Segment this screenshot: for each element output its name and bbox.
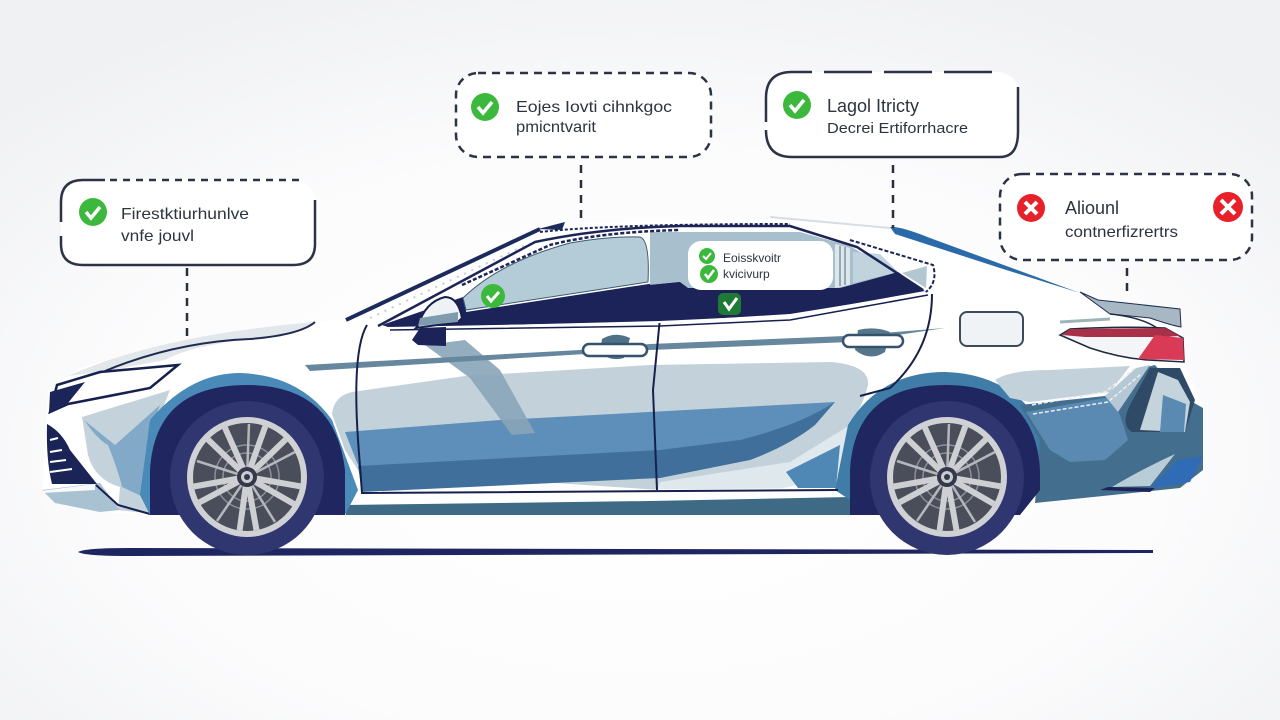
panel: warning callout xyxy=(1000,174,1252,260)
rear door handle xyxy=(843,328,903,357)
panel: legal callout xyxy=(766,72,1019,157)
icon: green check on front window xyxy=(481,284,505,308)
window label text: kvicivurp xyxy=(723,267,770,281)
rear door blue panel xyxy=(786,445,840,488)
beltline chrome xyxy=(389,292,925,329)
door shading: medium blue band xyxy=(345,402,835,470)
connector: panel 1 xyxy=(186,268,188,340)
door lines xyxy=(356,325,838,493)
A-pillar outer xyxy=(343,222,565,322)
rear wheel arch xyxy=(850,385,1040,515)
callout text: vnfe jouvl xyxy=(121,228,194,245)
car body xyxy=(42,220,1203,515)
rear bumper xyxy=(1020,365,1203,503)
rear spoiler xyxy=(1080,292,1181,327)
icon: small green check bottom xyxy=(700,265,718,283)
front wheel xyxy=(170,401,324,555)
callout text: Firestktiurhunlve xyxy=(121,206,249,223)
window label text: Eoisskvoitr xyxy=(723,251,781,265)
rear wheel xyxy=(870,401,1024,555)
icon: green check xyxy=(471,93,499,121)
rear bumper grey panel xyxy=(995,366,1130,402)
callout text: Lagol Itricty xyxy=(827,96,919,116)
car illustration xyxy=(40,217,1203,555)
icon: green check xyxy=(783,91,811,119)
connector: panel 3 xyxy=(892,165,894,228)
rear pillar stripes xyxy=(835,244,850,288)
hood edge xyxy=(68,322,315,376)
rear window surround xyxy=(680,232,925,320)
callout text: pmicntvarit xyxy=(516,119,597,136)
window label panel xyxy=(688,241,833,290)
fuel door xyxy=(960,312,1023,346)
panel: top-centre callout xyxy=(456,73,711,157)
callout text: Decrei Ertiforrhacre xyxy=(827,120,968,137)
side mirror xyxy=(412,297,462,346)
callout text: Eojes Iovti cihnkgoc xyxy=(516,99,672,116)
front arch trim xyxy=(140,373,358,515)
rear quarter glass xyxy=(853,252,898,283)
callout text: Aliounl xyxy=(1065,198,1119,218)
windows navy xyxy=(382,272,926,327)
front grille xyxy=(47,424,97,484)
door shading: light band xyxy=(332,362,868,490)
blue trunk strip xyxy=(890,227,1080,293)
headlight xyxy=(49,365,178,413)
connector: panel 2 xyxy=(580,165,582,218)
icon: green check on rear window xyxy=(718,293,741,315)
rear arch trim xyxy=(835,372,1042,500)
tail light xyxy=(1060,327,1184,362)
front window glass xyxy=(463,237,648,310)
swage line xyxy=(305,328,945,371)
door shading: lower white xyxy=(657,425,850,490)
door shading: dark blue band xyxy=(358,402,835,492)
B-pillar xyxy=(650,232,682,285)
mirror shadow diagonal xyxy=(425,340,535,435)
ground shadow line xyxy=(78,548,1153,556)
callout text: contnerfizrertrs xyxy=(1065,224,1178,241)
front bumper shading xyxy=(82,390,170,515)
icon: red cross right xyxy=(1213,192,1243,222)
sill xyxy=(345,488,850,515)
icon: red cross left xyxy=(1017,194,1045,222)
front door handle xyxy=(583,335,647,359)
icon: green check xyxy=(79,198,107,226)
panel: front callout xyxy=(61,180,315,266)
front wheel arch xyxy=(150,385,345,515)
icon: small green check top xyxy=(699,248,715,264)
connector: panel 4 xyxy=(1126,268,1128,296)
